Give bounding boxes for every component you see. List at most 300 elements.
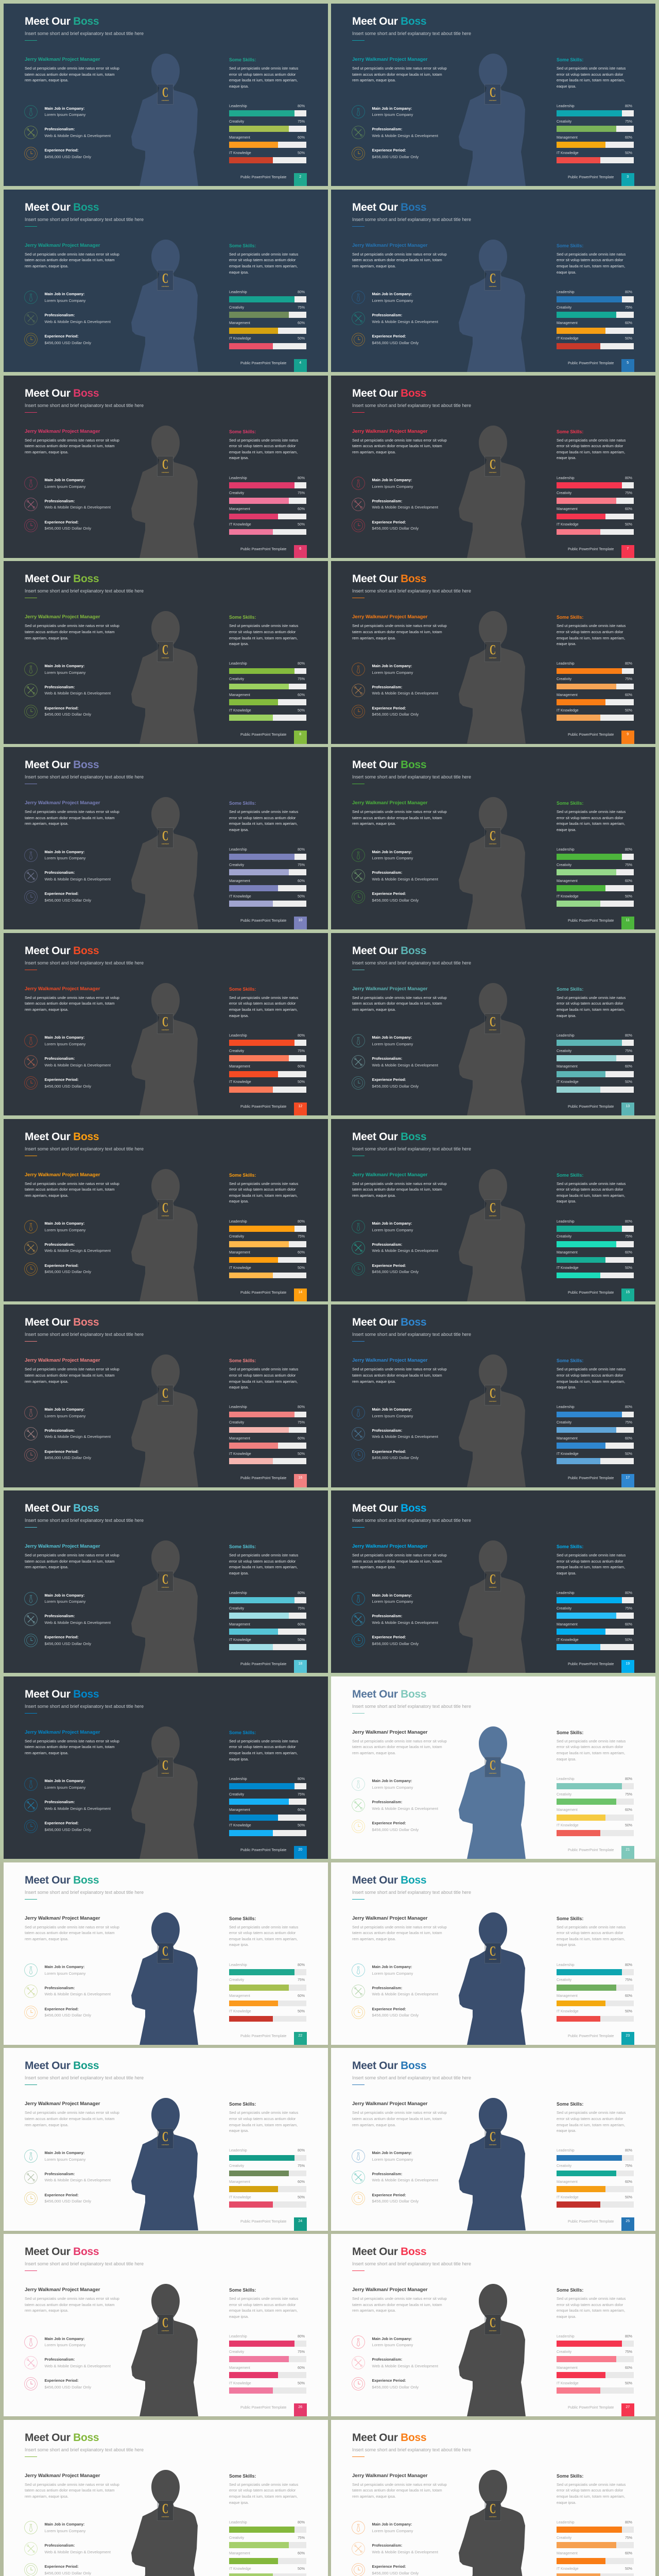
skills text: error sit volup tatem accus antium dolor [229,1930,296,1935]
silhouette [130,1539,200,1673]
bar: leadership [557,2334,634,2347]
skills text [229,1738,298,1762]
bar: leadership [229,476,306,488]
footer label: Public PowerPoint Template [568,918,614,923]
bar: creativity: Creativity [557,2164,571,2168]
item: main job [352,2335,439,2349]
skills text: Sed ut perspiciatis unde omnis iste natus [557,1925,626,1929]
bar: management: 60% [625,321,632,325]
bar: management: Management [229,1808,250,1812]
item: experience [352,1448,439,1462]
skills text [229,2110,298,2134]
bar: it knowledge: IT Knowledge [557,2567,579,2571]
skills heading: Some Skills: [229,243,256,248]
bio text: rem aperiam, eaque ipsa. [352,78,396,82]
bar: leadership: 80% [625,662,632,666]
item: professionalism: Web & Mobile Design & Development [44,877,111,882]
icon: tie [352,663,365,676]
bar: creativity: 75% [625,677,632,681]
skills text: Sed ut perspiciatis unde omnis iste natus [229,2482,298,2487]
bar: leadership: Leadership [229,2521,247,2524]
bar: leadership: 80% [298,848,305,852]
item: professionalism: Professionalism: [372,313,402,317]
logo badge [157,1942,174,1963]
skills text [229,66,299,89]
bar: creativity: 75% [625,2350,632,2354]
bar: it knowledge [557,708,634,721]
page number: 20 [298,1848,302,1852]
footer label: Public PowerPoint Template [568,2405,614,2410]
name heading: Jerry Walkman/ Project Manager [352,1544,427,1549]
item: experience: $456,000 USD Dollar Only [44,526,91,531]
subtitle: Insert some short and brief explanatory text about title here [352,2261,471,2266]
skills heading: Some Skills: [557,1173,583,1178]
bar: leadership [557,848,634,860]
bio text [25,1181,119,1198]
footer label: Public PowerPoint Template [568,175,614,179]
skills text: eaque ipsa. [557,455,576,460]
page number [621,2032,634,2045]
name heading: Jerry Walkman/ Project Manager [352,1916,427,1921]
footer label: Public PowerPoint Template [568,1848,614,1852]
icon: clock [24,333,38,346]
logo badge [157,1385,174,1405]
bio text: tatem accus antium dolor emque lauda nt ium, totam [352,444,442,448]
logo badge: C [490,2501,496,2516]
bar: leadership: 80% [625,2149,632,2153]
bar: management: Management [229,1065,250,1069]
skills text: error sit volup tatem accus antium dolor [229,444,296,448]
skills text: emque lauda nt ium, totam rem aperiam, [557,1007,625,1012]
icon: clock [24,1262,38,1276]
title: Meet Our Boss [25,1874,99,1886]
subtitle: Insert some short and brief explanatory text about title here [352,1890,471,1895]
bio text: rem aperiam, eaque ipsa. [352,821,396,826]
item: professionalism [352,126,438,139]
footer label: Public PowerPoint Template [240,2219,286,2224]
subtitle: Insert some short and brief explanatory text about title here [352,960,471,965]
skills text [229,1181,298,1205]
bar: creativity [229,120,306,132]
item: main job: Main Job in Company: [372,1964,412,1969]
logo badge: C [490,1014,496,1029]
item: main job: Lorem Ipsum Company [372,2343,413,2347]
logo badge: C [490,2129,496,2144]
logo badge [484,1942,501,1963]
bio text [25,66,119,82]
logo badge: CONTENT [489,1958,496,1960]
item: professionalism [24,1985,112,1998]
item: experience [24,890,112,904]
bio text: rem aperiam, eaque ipsa. [352,2308,396,2313]
skills heading: Some Skills: [229,1730,256,1735]
bio text [352,623,447,641]
item: main job: Main Job in Company: [44,106,84,111]
item: professionalism: Professionalism: [44,1242,75,1247]
bar: leadership: 80% [298,291,305,294]
skills text: Sed ut perspiciatis unde omnis iste natus [229,438,298,442]
icon: tools [352,1613,365,1626]
item: experience [24,2006,112,2019]
subtitle: Insert some short and brief explanatory text about title here [352,403,471,408]
skills text: error sit volup tatem accus antium dolor [557,1930,623,1935]
bar: management: Management [557,1808,578,1812]
bar: it knowledge: 50% [625,709,632,713]
logo badge [484,641,501,662]
item: professionalism: Professionalism: [372,2357,402,2362]
item: main job [24,477,112,490]
icon: tools [24,1241,38,1255]
skills text [557,251,626,275]
icon: tie [24,477,38,490]
icon: tie [352,2149,365,2163]
bar: leadership: 80% [625,1405,632,1409]
skills text: error sit volup tatem accus antium dolor [229,816,296,820]
bar: it knowledge: IT Knowledge [229,709,251,713]
item: main job: Main Job in Company: [44,664,84,668]
bio text: Sed ut perspiciatis unde omnis iste natus error sit volup [352,2296,447,2301]
page number [621,1288,634,1301]
silhouette [457,1725,527,1859]
title: Meet Our Boss [352,759,426,771]
icon: clock [24,705,38,718]
bar: creativity: 75% [625,1049,632,1053]
bar: creativity [229,1234,306,1247]
bar: creativity: 75% [625,1978,632,1982]
bio text: tatem accus antium dolor emque lauda nt ium, totam [352,1744,442,1749]
bio text [352,66,447,82]
subtitle: Insert some short and brief explanatory text about title here [352,31,471,36]
skills text: error sit volup tatem accus antium dolor [557,2488,623,2493]
icon: tools [352,126,365,139]
bio text: Sed ut perspiciatis unde omnis iste natus error sit volup [352,2482,447,2487]
bar: leadership [229,1591,306,1603]
item: main job: Main Job in Company: [44,1221,84,1226]
name heading: Jerry Walkman/ Project Manager [352,800,427,806]
skills heading: Some Skills: [229,2102,256,2107]
bar: it knowledge: 50% [625,1638,632,1642]
bio text: Sed ut perspiciatis unde omnis iste natus error sit volup [25,438,119,442]
skills text: error sit volup tatem accus antium dolor [557,816,623,820]
item: experience: $456,000 USD Dollar Only [372,155,419,159]
icon: clock [24,890,38,904]
page number: 21 [626,1848,630,1852]
bio text: tatem accus antium dolor emque lauda nt ium, totam [25,258,115,262]
title: Meet Our Boss [352,2246,426,2258]
silhouette [457,2097,527,2231]
item: professionalism: Web & Mobile Design & Development [372,877,438,882]
skills heading: Some Skills: [557,57,583,62]
item: experience: Experience Period: [372,1263,406,1268]
page number: 13 [626,1105,630,1108]
bar: creativity: 75% [298,677,305,681]
icon: tools [352,2171,365,2184]
skills text: eaque ipsa. [557,1757,576,1761]
logo badge: CONTENT [162,1586,169,1588]
bar: leadership [229,1777,306,1789]
bio text: Sed ut perspiciatis unde omnis iste natus error sit volup [25,1739,119,1743]
bar: leadership: Leadership [557,662,575,666]
bar: leadership [229,1963,306,1975]
skills heading: Some Skills: [557,987,583,992]
bio text: tatem accus antium dolor emque lauda nt ium, totam [25,1930,115,1935]
bar: management: 60% [625,1808,632,1812]
skills text: Sed ut perspiciatis unde omnis iste natus [229,2296,298,2301]
logo badge: C [162,1757,168,1773]
skills text: error sit volup tatem accus antium dolor [229,258,296,262]
item: main job [352,2521,439,2534]
footer label: Public PowerPoint Template [568,1476,614,1480]
icon: clock [24,2006,38,2019]
skills heading: Some Skills: [557,801,583,806]
bar: leadership: 80% [625,1777,632,1781]
bar: management: Management [229,879,250,883]
bar: creativity [229,2164,306,2176]
skills text: error sit volup tatem accus antium dolor [557,1373,623,1378]
logo badge: CONTENT [489,657,496,659]
skills text: Sed ut perspiciatis unde omnis iste natus [557,1553,626,1557]
page number: 4 [299,361,301,365]
bar: creativity [229,1606,306,1619]
item: experience: Experience Period: [44,520,79,524]
skills text: error sit volup tatem accus antium dolor [557,1187,623,1192]
bar: creativity [229,1792,306,1805]
bar: management [229,879,306,891]
item: professionalism: Professionalism: [44,2357,75,2362]
bar: management: Management [229,1623,250,1626]
logo badge: C [162,2501,168,2516]
page number: 22 [298,2034,302,2037]
item: experience [24,2192,112,2205]
bar: creativity: Creativity [557,1421,571,1425]
item: main job [24,105,85,118]
skills text: Sed ut perspiciatis unde omnis iste natus [557,1739,626,1743]
bar: leadership: 80% [298,662,305,666]
bar: creativity: Creativity [557,2350,571,2354]
bar: leadership: 80% [298,476,305,480]
skills text: eaque ipsa. [229,1199,249,1204]
skills text: Sed ut perspiciatis unde omnis iste natus [557,2482,626,2487]
item: experience: Experience Period: [372,2007,406,2011]
item: main job [24,1220,112,1233]
silhouette [130,796,200,929]
subtitle: Insert some short and brief explanatory text about title here [25,403,144,408]
bar: creativity [557,1792,634,1805]
item: main job: Lorem Ipsum Company [372,1042,413,1046]
bar: leadership [557,1033,634,1046]
silhouette [130,1911,200,2045]
logo badge [157,1757,174,1777]
bio text [352,995,447,1013]
bio text: rem aperiam, eaque ipsa. [25,264,68,268]
item: main job: Lorem Ipsum Company [44,2529,85,2533]
bar: leadership: Leadership [557,1591,575,1595]
skills text: emque lauda nt ium, totam rem aperiam, [557,1937,625,1941]
skills heading: Some Skills: [229,1916,256,1921]
item: main job: Lorem Ipsum Company [44,1971,85,1976]
bar: management: Management [557,1437,578,1440]
bar: creativity: 75% [298,1421,305,1425]
bar: management: Management [557,507,578,511]
icon: clock [352,1076,365,1090]
subtitle: Insert some short and brief explanatory text about title here [25,2261,144,2266]
item: experience: Experience Period: [372,148,406,152]
bar: leadership: Leadership [229,291,247,294]
item: professionalism: Web & Mobile Design & Development [372,1992,438,1996]
bar: leadership [229,1405,306,1417]
skills text: error sit volup tatem accus antium dolor [557,444,623,448]
icon: clock [24,519,38,532]
item: main job: Lorem Ipsum Company [372,1785,413,1790]
skills text: Sed ut perspiciatis unde omnis iste natus [557,252,626,257]
skills heading: Some Skills: [557,1544,583,1549]
silhouette [457,796,527,929]
item: experience [352,1262,439,1276]
bar: creativity: Creativity [557,492,571,495]
slide 3 [331,4,655,186]
skills text [557,623,626,647]
skills text: error sit volup tatem accus antium dolor [229,2116,296,2121]
bar: management: 60% [298,1437,305,1440]
bar: leadership: 80% [298,1034,305,1038]
bio text: rem aperiam, eaque ipsa. [25,1937,68,1941]
page number [621,731,634,744]
skills text: emque lauda nt ium, totam rem aperiam, [557,821,625,826]
item: professionalism: Professionalism: [372,127,402,131]
bar: it knowledge [229,1266,306,1278]
icon: clock [24,147,38,160]
icon: tools [24,498,38,511]
title: Meet Our Boss [25,15,99,27]
bar: creativity: Creativity [229,1235,244,1239]
bio text: Sed ut perspiciatis unde omnis iste natus error sit volup [352,438,447,442]
item: professionalism: Professionalism: [372,1986,402,1990]
bar: management: Management [229,693,250,697]
bar: creativity [557,306,634,318]
bar: management: Management [229,1437,250,1440]
item: main job: Main Job in Company: [372,1407,412,1412]
item: main job [24,2521,112,2534]
bar: creativity: 75% [298,1978,305,1982]
bio text [352,809,447,827]
item: professionalism: Web & Mobile Design & Development [372,691,438,696]
skills text: emque lauda nt ium, totam rem aperiam, [557,636,625,640]
skills text [557,2110,626,2134]
logo badge [157,1013,174,1034]
item: professionalism [24,126,111,139]
item: experience: $456,000 USD Dollar Only [44,155,91,159]
footer label: Public PowerPoint Template [240,2033,286,2038]
name heading: Jerry Walkman/ Project Manager [25,1730,100,1735]
icon: tie [24,1406,38,1419]
silhouette [457,239,527,372]
skills heading: Some Skills: [229,1544,256,1549]
bar: it knowledge: IT Knowledge [557,1824,579,1827]
icon: tie [352,1777,365,1791]
skills heading: Some Skills: [557,2102,583,2107]
item: experience: Experience Period: [44,1263,79,1268]
slide 19 [331,1490,655,1673]
bar: management: 60% [298,2552,305,2555]
icon: clock [24,1820,38,1833]
item: experience: Experience Period: [44,1077,79,1082]
item: experience: Experience Period: [372,1077,406,1082]
bar: management: Management [229,2366,250,2370]
item: main job: Lorem Ipsum Company [372,484,413,489]
logo badge: C [162,1943,168,1959]
skills text: emque lauda nt ium, totam rem aperiam, [557,78,625,82]
bio text [352,1552,447,1570]
bar: leadership: Leadership [229,2335,247,2338]
bio text [352,251,447,269]
item: professionalism [352,2171,439,2184]
bar: leadership [557,104,634,116]
silhouette [131,54,198,186]
bar: creativity: 75% [625,1607,632,1611]
skills heading: Some Skills: [557,243,583,248]
bar: management [229,1064,306,1077]
icon: tools [352,1055,365,1069]
bio text: tatem accus antium dolor emque lauda nt ium, totam [25,444,115,448]
footer label: Public PowerPoint Template [240,918,286,923]
bio text: rem aperiam, eaque ipsa. [25,450,68,454]
item: professionalism: Professionalism: [44,313,75,317]
logo badge: CONTENT [489,1400,496,1402]
icon: tie [352,1963,365,1977]
title: Meet Our Boss [352,1502,426,1514]
page number [621,173,634,186]
icon: clock [352,705,365,718]
bar: creativity: 75% [625,1793,632,1797]
bar: creativity [229,306,306,318]
bar: it knowledge: IT Knowledge [229,1452,251,1456]
bar: it knowledge: IT Knowledge [557,709,579,713]
item: main job [24,2149,112,2163]
bio text [25,1924,119,1942]
skills text [229,1366,298,1391]
slide 6 [4,375,328,558]
logo badge [484,1385,501,1405]
bar: it knowledge: IT Knowledge [557,2382,579,2385]
slide 24 [4,2048,328,2231]
bio text [352,2110,447,2128]
silhouette [457,1167,527,1301]
icon: tools [352,2356,365,2369]
skills text: error sit volup tatem accus antium dolor [229,1373,296,1378]
bar: leadership: Leadership [557,1777,575,1781]
icon: tools [24,1427,38,1440]
page number [294,1288,307,1301]
item: experience [24,1634,112,1647]
item: main job: Lorem Ipsum Company [372,298,413,303]
skills text [557,1181,626,1205]
skills text: eaque ipsa. [229,1013,249,1018]
bio text: rem aperiam, eaque ipsa. [25,1565,68,1569]
item: main job [352,2149,439,2163]
logo badge: C [162,1199,168,1215]
bar: leadership: Leadership [557,848,575,852]
subtitle: Insert some short and brief explanatory text about title here [25,2447,144,2452]
icon: tie [352,105,365,118]
silhouette [457,610,527,744]
item: professionalism: Web & Mobile Design & Development [44,691,111,696]
item: experience [352,2377,439,2391]
item: professionalism [24,498,112,511]
bar: creativity: 75% [298,1049,305,1053]
silhouette [130,610,200,744]
footer label: Public PowerPoint Template [240,1104,286,1109]
bar: creativity: Creativity [557,120,571,124]
